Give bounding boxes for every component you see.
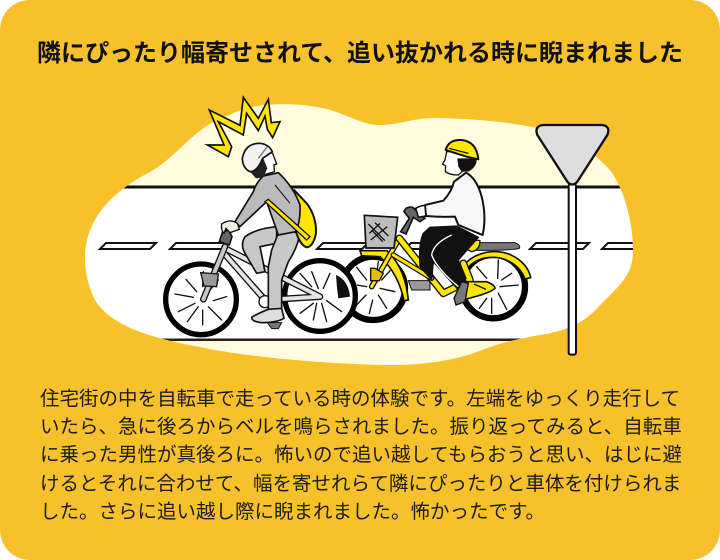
illustration: two cyclists on a road bbox=[85, 95, 633, 365]
yield road sign bbox=[536, 125, 608, 355]
bag strap bbox=[265, 199, 310, 240]
title: 隣にぴったり幅寄せされて、追い抜かれる時に睨まれました bbox=[37, 40, 683, 67]
sign pole bbox=[569, 184, 576, 355]
cyclist 1: grey bicycle and rider bbox=[166, 97, 355, 335]
frame bbox=[372, 238, 470, 293]
body text: に乗った男性が真後ろに。怖いので追い越してもらおうと思い、はじに避 bbox=[40, 444, 682, 466]
handlebar bbox=[219, 230, 232, 245]
crank bbox=[259, 296, 271, 308]
messenger bag bbox=[294, 190, 316, 247]
shoe bbox=[252, 308, 284, 323]
legs bbox=[420, 226, 478, 290]
road dashes bbox=[100, 243, 650, 249]
front hub bracket bbox=[371, 268, 383, 281]
body text bbox=[40, 388, 682, 523]
hand bbox=[221, 221, 239, 233]
shoe bbox=[454, 282, 468, 305]
chain guard bbox=[465, 282, 495, 299]
sign plate bbox=[536, 125, 608, 184]
handlebar bbox=[401, 207, 425, 234]
yellow bicycle wheel seen through spokes bbox=[336, 275, 350, 298]
helmet bbox=[446, 140, 478, 159]
cyclist 2: yellow bicycle and rider bbox=[342, 140, 531, 320]
body text: いたら、急に後ろからベルを鳴らされました。振り返ってみると、自転車 bbox=[40, 416, 682, 438]
saddle bbox=[465, 240, 480, 252]
front hub bracket bbox=[201, 273, 218, 287]
road bbox=[60, 187, 660, 339]
wheels bbox=[166, 261, 355, 335]
shock burst bbox=[207, 97, 280, 157]
head and hair bbox=[443, 150, 475, 175]
body text: した。さらに追い越し際に睨まれました。怖かったです。 bbox=[40, 501, 545, 523]
pedal foot shadow bbox=[408, 281, 430, 290]
rear mudguard bbox=[458, 252, 531, 279]
background blob bbox=[85, 104, 633, 365]
torso and arm bbox=[235, 173, 300, 235]
hand bbox=[416, 206, 426, 217]
body text: けるとそれに合わせて、幅を寄せれらて隣にぴったりと車体を付けられま bbox=[40, 473, 681, 495]
frame bbox=[203, 247, 320, 300]
body text: 住宅街の中を自転車で走っている時の体験です。左端をゆっくり走行して bbox=[40, 388, 680, 410]
wheels bbox=[342, 255, 525, 320]
torso and arm bbox=[425, 173, 484, 235]
rear carrier bbox=[477, 243, 520, 250]
front mudguard bbox=[360, 251, 408, 301]
face and beard bbox=[258, 152, 277, 175]
basket bbox=[364, 215, 398, 248]
helmet bbox=[242, 143, 272, 172]
front leg bbox=[268, 232, 300, 312]
rear leg bbox=[242, 227, 277, 273]
